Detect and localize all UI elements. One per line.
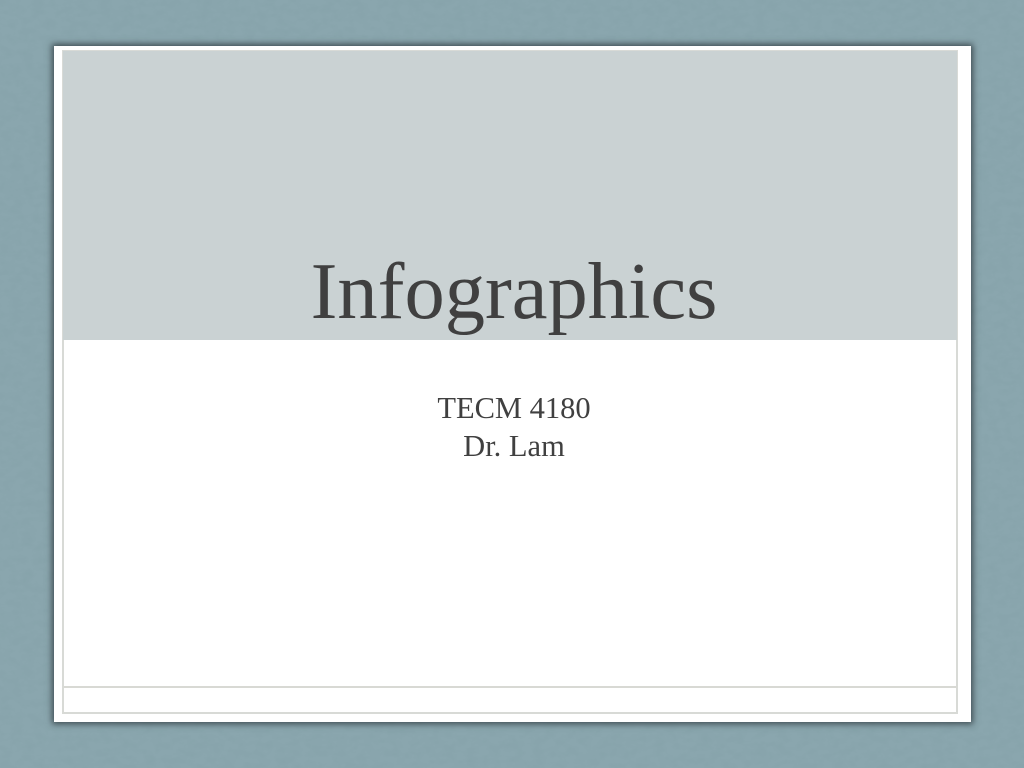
subtitle: Dr. Lam: [463, 429, 565, 463]
title: Infographics: [311, 247, 717, 336]
subtitle: [437, 391, 591, 463]
white card: [54, 46, 971, 722]
title band: [63, 51, 957, 340]
inner frame: [62, 50, 958, 714]
subtitle: TECM 4180: [437, 391, 591, 425]
footer divider: [63, 686, 957, 688]
